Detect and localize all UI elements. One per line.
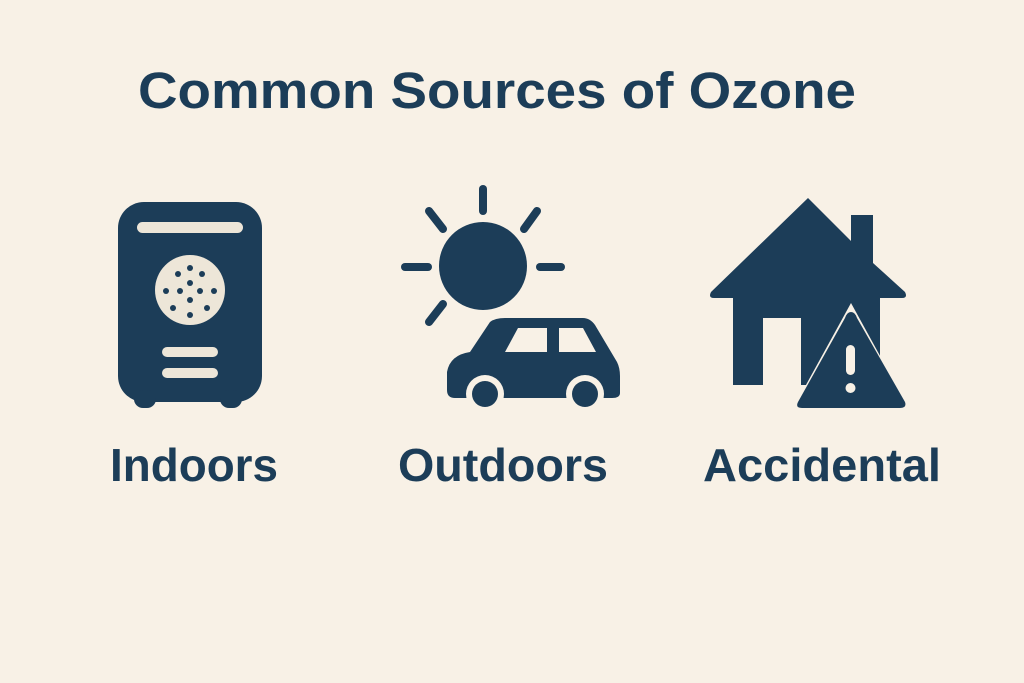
icon: house with warning [710, 198, 912, 414]
label: outdoors: Outdoors [398, 439, 608, 491]
icon: air purifier [118, 202, 262, 408]
label: indoors: Indoors [110, 439, 278, 491]
icon: sun and car [405, 189, 620, 413]
title: Common Sources of Ozone [138, 62, 856, 119]
label: accidental: Accidental [703, 439, 941, 491]
